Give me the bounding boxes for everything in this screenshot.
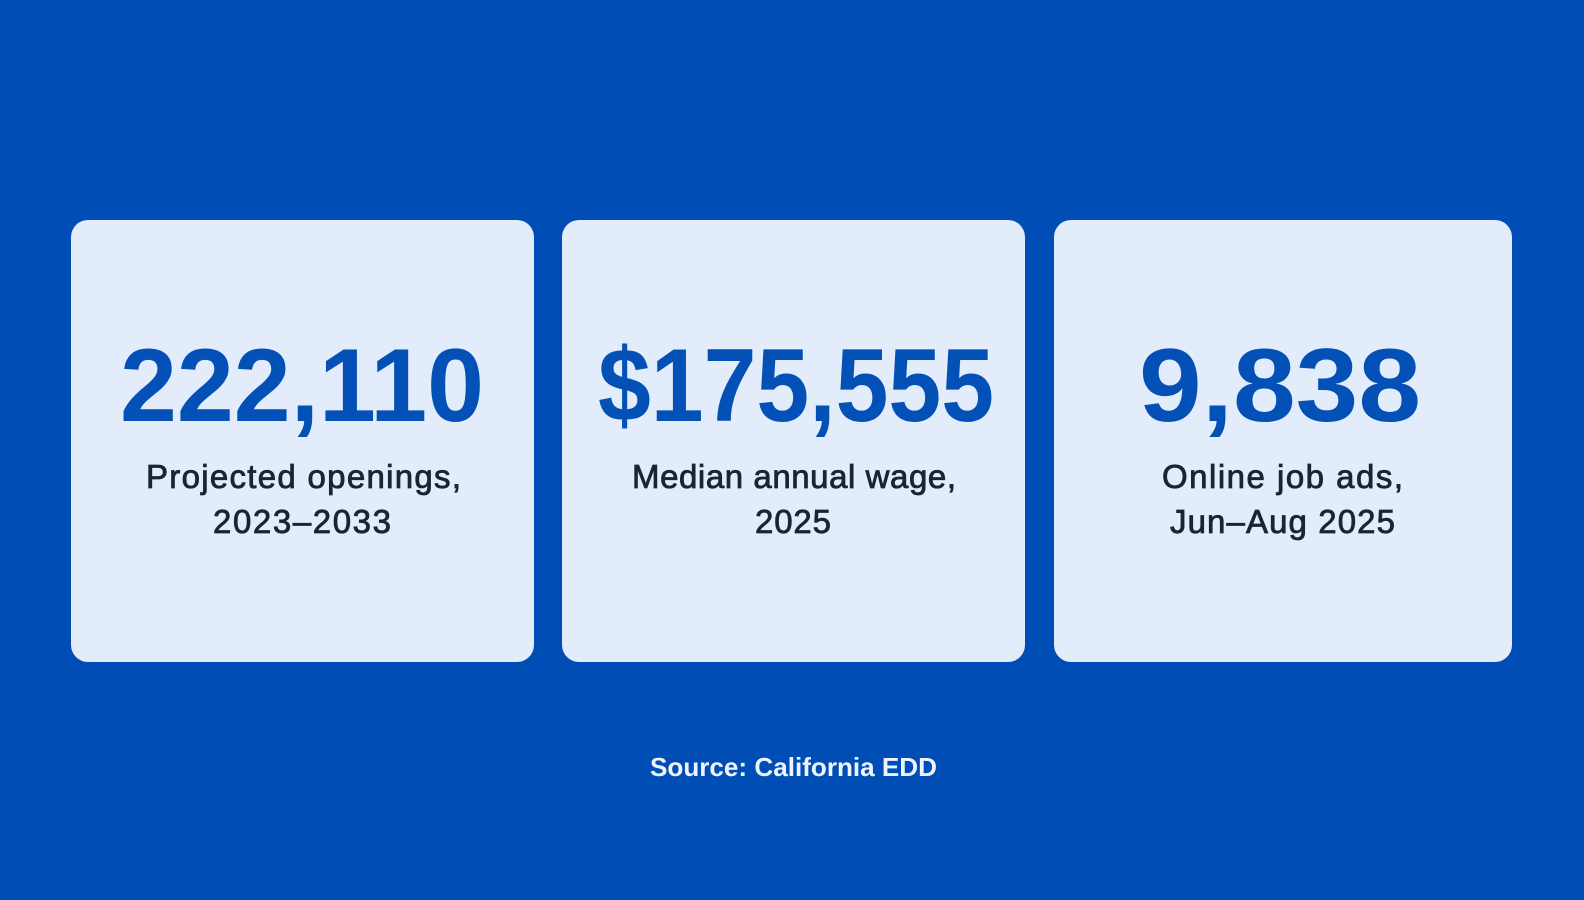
panel: median annual wage: [562, 220, 1025, 662]
label: projected openings, 2023–2033: [146, 458, 461, 540]
stat: $175,555: $175,555: [598, 328, 994, 444]
label: median annual wage, 2025: 2025: [755, 503, 831, 540]
label: online job ads, Jun–Aug 2025: Online job ads,: [1162, 458, 1403, 495]
label: median annual wage, 2025: Median annual wage,: [632, 458, 956, 495]
label: online job ads, Jun–Aug 2025: Jun–Aug 2025: [1170, 503, 1395, 540]
label: projected openings, 2023–2033: 2023–2033: [213, 503, 391, 540]
label: online job ads, Jun–Aug 2025: [1162, 458, 1403, 540]
label: projected openings, 2023–2033: Projected openings,: [146, 458, 461, 495]
stat: 9,838: 9,838: [1139, 328, 1421, 444]
label: median annual wage, 2025: [632, 458, 956, 540]
panel: projected openings: [71, 220, 534, 662]
source note: Source: California EDD: [650, 752, 937, 782]
stat: 222,110: 222,110: [120, 328, 484, 444]
panel: online job ads: [1054, 220, 1512, 662]
